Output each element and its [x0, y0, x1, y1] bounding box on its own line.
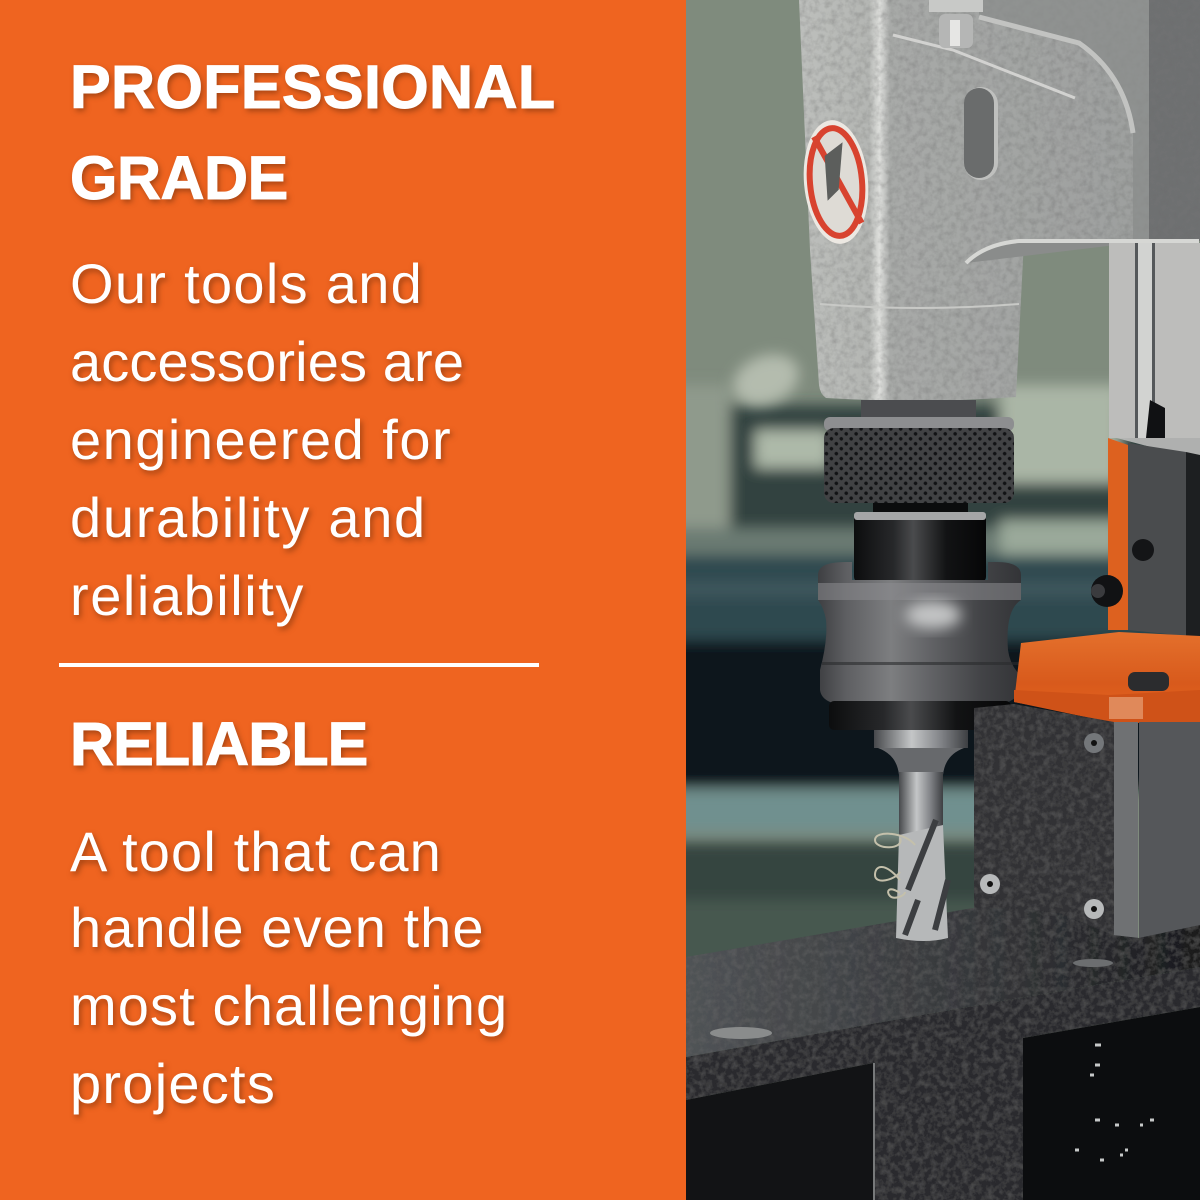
text block: durability description: durability and [70, 486, 427, 549]
heading: reliable: RELIABLE [70, 710, 367, 778]
steel work table [686, 908, 1200, 1200]
text block: reliable description: A tool that can [70, 820, 442, 883]
text block: durability description [70, 252, 466, 632]
text block: durability description: reliability [70, 564, 305, 627]
guide rail with slot [1109, 243, 1200, 460]
text block: durability description: engineered for [70, 408, 452, 471]
orange machine base and guide [1014, 438, 1200, 725]
threads and knurled collar [824, 400, 1014, 503]
icon: prohibition safety sticker [799, 117, 873, 247]
drill body casting [799, 0, 1200, 401]
text block: reliable description [70, 820, 509, 1120]
text block: reliable description: handle even the [70, 896, 485, 959]
text block: durability description: Our tools and [70, 252, 423, 315]
photo: magnetic drill cutting steel [686, 0, 1200, 1200]
photo background [670, 0, 1200, 1200]
text block: reliable description: most challenging [70, 974, 508, 1037]
text block: durability description: accessories are [70, 330, 464, 393]
panel: orange text column [0, 0, 686, 1200]
steel chuck body [818, 562, 1021, 730]
text block: reliable description: projects [70, 1052, 276, 1115]
heading: professional grade: GRADE [70, 144, 288, 212]
heading: professional grade [70, 53, 558, 212]
heading: professional grade: PROFESSIONAL [70, 53, 555, 121]
black adapter sleeve [854, 503, 986, 582]
steel mounting block [974, 704, 1200, 945]
annular cutter bit [874, 730, 968, 941]
